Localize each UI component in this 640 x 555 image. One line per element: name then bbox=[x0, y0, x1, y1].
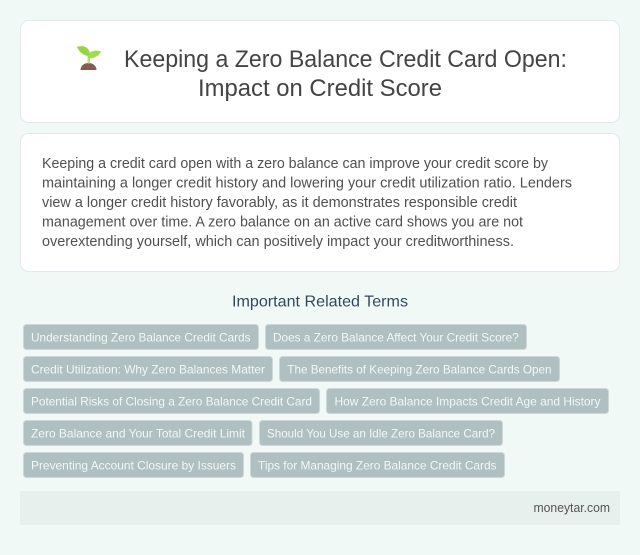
tag: understanding zero balance: Understanding Zero Balance Credit Cards bbox=[31, 330, 250, 344]
tag: idle zero balance card bbox=[260, 420, 502, 446]
tag: understanding zero balance bbox=[24, 324, 258, 350]
tag: preventing account closure bbox=[24, 452, 244, 478]
tag group: related terms bbox=[24, 324, 608, 478]
tag: credit utilization bbox=[24, 356, 272, 382]
tag: tips for managing bbox=[250, 452, 504, 478]
tag: preventing account closure: Preventing Account Closure by Issuers bbox=[31, 458, 236, 472]
text: paragraph line 3: view a longer credit history favorably, as it demonstrates responsible credit bbox=[42, 195, 517, 211]
text: footer source: moneytar.com bbox=[534, 501, 610, 515]
text: paragraph line 4: management over time. A zero balance on an active card shows you are not bbox=[42, 214, 523, 230]
tag: does a zero balance affect score: Does a Zero Balance Affect Your Credit Score? bbox=[273, 330, 519, 344]
panel: title card bbox=[20, 20, 620, 122]
tag: tips for managing: Tips for Managing Zero Balance Credit Cards bbox=[258, 458, 496, 472]
tag: benefits of keeping open: The Benefits of Keeping Zero Balance Cards Open bbox=[287, 362, 552, 376]
text: paragraph line 2: maintaining a longer credit history and lowering your credit utilization ratio. Lenders bbox=[42, 176, 572, 192]
tag: total credit limit: Zero Balance and Your Total Credit Limit bbox=[31, 426, 246, 440]
heading: important related terms: Important Related Terms bbox=[232, 294, 408, 310]
heading: title line 1: Keeping a Zero Balance Credit Card Open: bbox=[124, 46, 567, 73]
tag: potential risks of closing bbox=[24, 388, 320, 414]
tag: credit utilization: Credit Utilization: Why Zero Balances Matter bbox=[31, 362, 265, 376]
tag: idle zero balance card: Should You Use an Idle Zero Balance Card? bbox=[267, 426, 495, 440]
tag: credit age and history: How Zero Balance Impacts Credit Age and History bbox=[334, 394, 600, 408]
tag: does a zero balance affect score bbox=[266, 324, 526, 350]
tag: credit age and history bbox=[326, 388, 608, 414]
footer bbox=[20, 491, 620, 525]
panel: summary paragraph bbox=[20, 134, 620, 272]
tag: total credit limit bbox=[24, 420, 252, 446]
tag: potential risks of closing: Potential Risks of Closing a Zero Balance Credit Card bbox=[31, 394, 312, 408]
icon: sprout bbox=[77, 46, 101, 70]
text: paragraph line 1: Keeping a credit card open with a zero balance can improve your credit score by bbox=[42, 156, 549, 172]
text: paragraph line 5: overextending yourself, which can positively impact your creditworthiness. bbox=[42, 234, 514, 250]
tag: benefits of keeping open bbox=[280, 356, 560, 382]
heading: title line 2: Impact on Credit Score bbox=[198, 75, 442, 102]
